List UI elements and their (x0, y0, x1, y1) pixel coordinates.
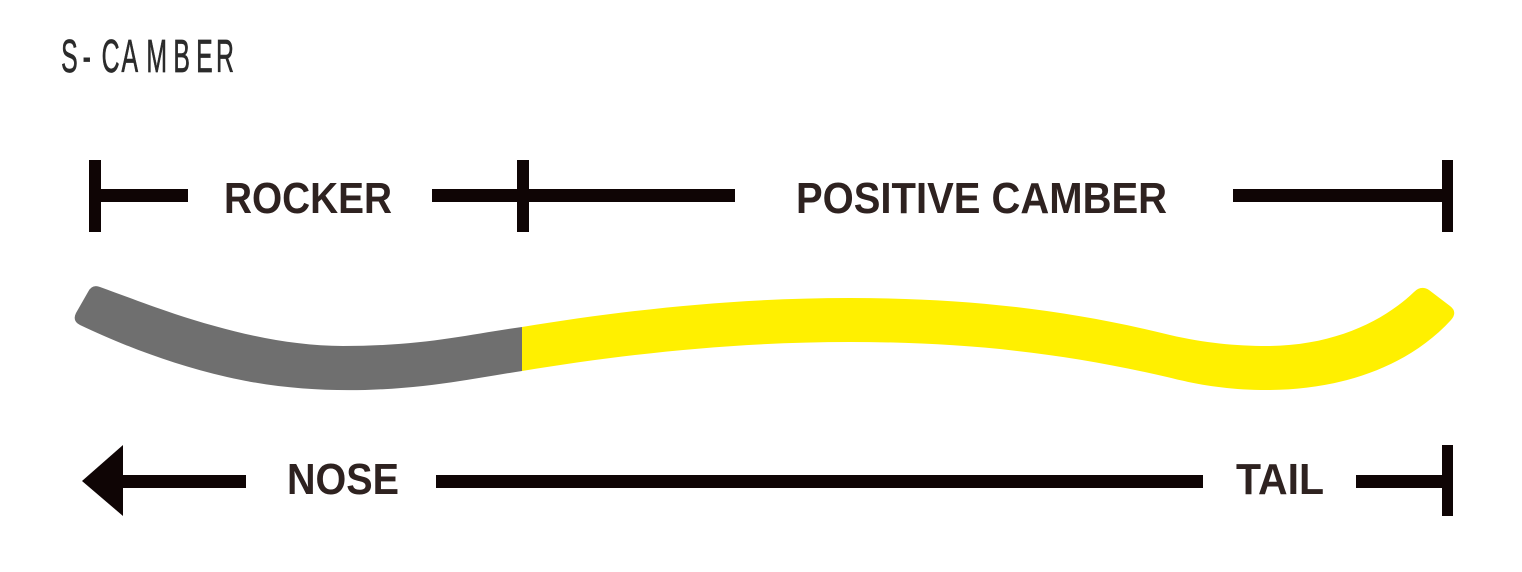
nose and tail direction bar (82, 445, 1453, 516)
rocker section of ski (75, 286, 522, 390)
title: S-CAMBER (61, 31, 234, 82)
positive camber dimension bar (517, 160, 1453, 232)
rocker label: ROCKER (224, 174, 392, 223)
tail label: TAIL (1236, 455, 1324, 504)
positive camber label: POSITIVE CAMBER (796, 174, 1167, 223)
positive camber section of ski (522, 288, 1454, 390)
nose label: NOSE (287, 455, 399, 504)
rocker dimension bar (89, 160, 523, 232)
arrow: nose (82, 445, 123, 516)
ski profile (75, 286, 1454, 390)
